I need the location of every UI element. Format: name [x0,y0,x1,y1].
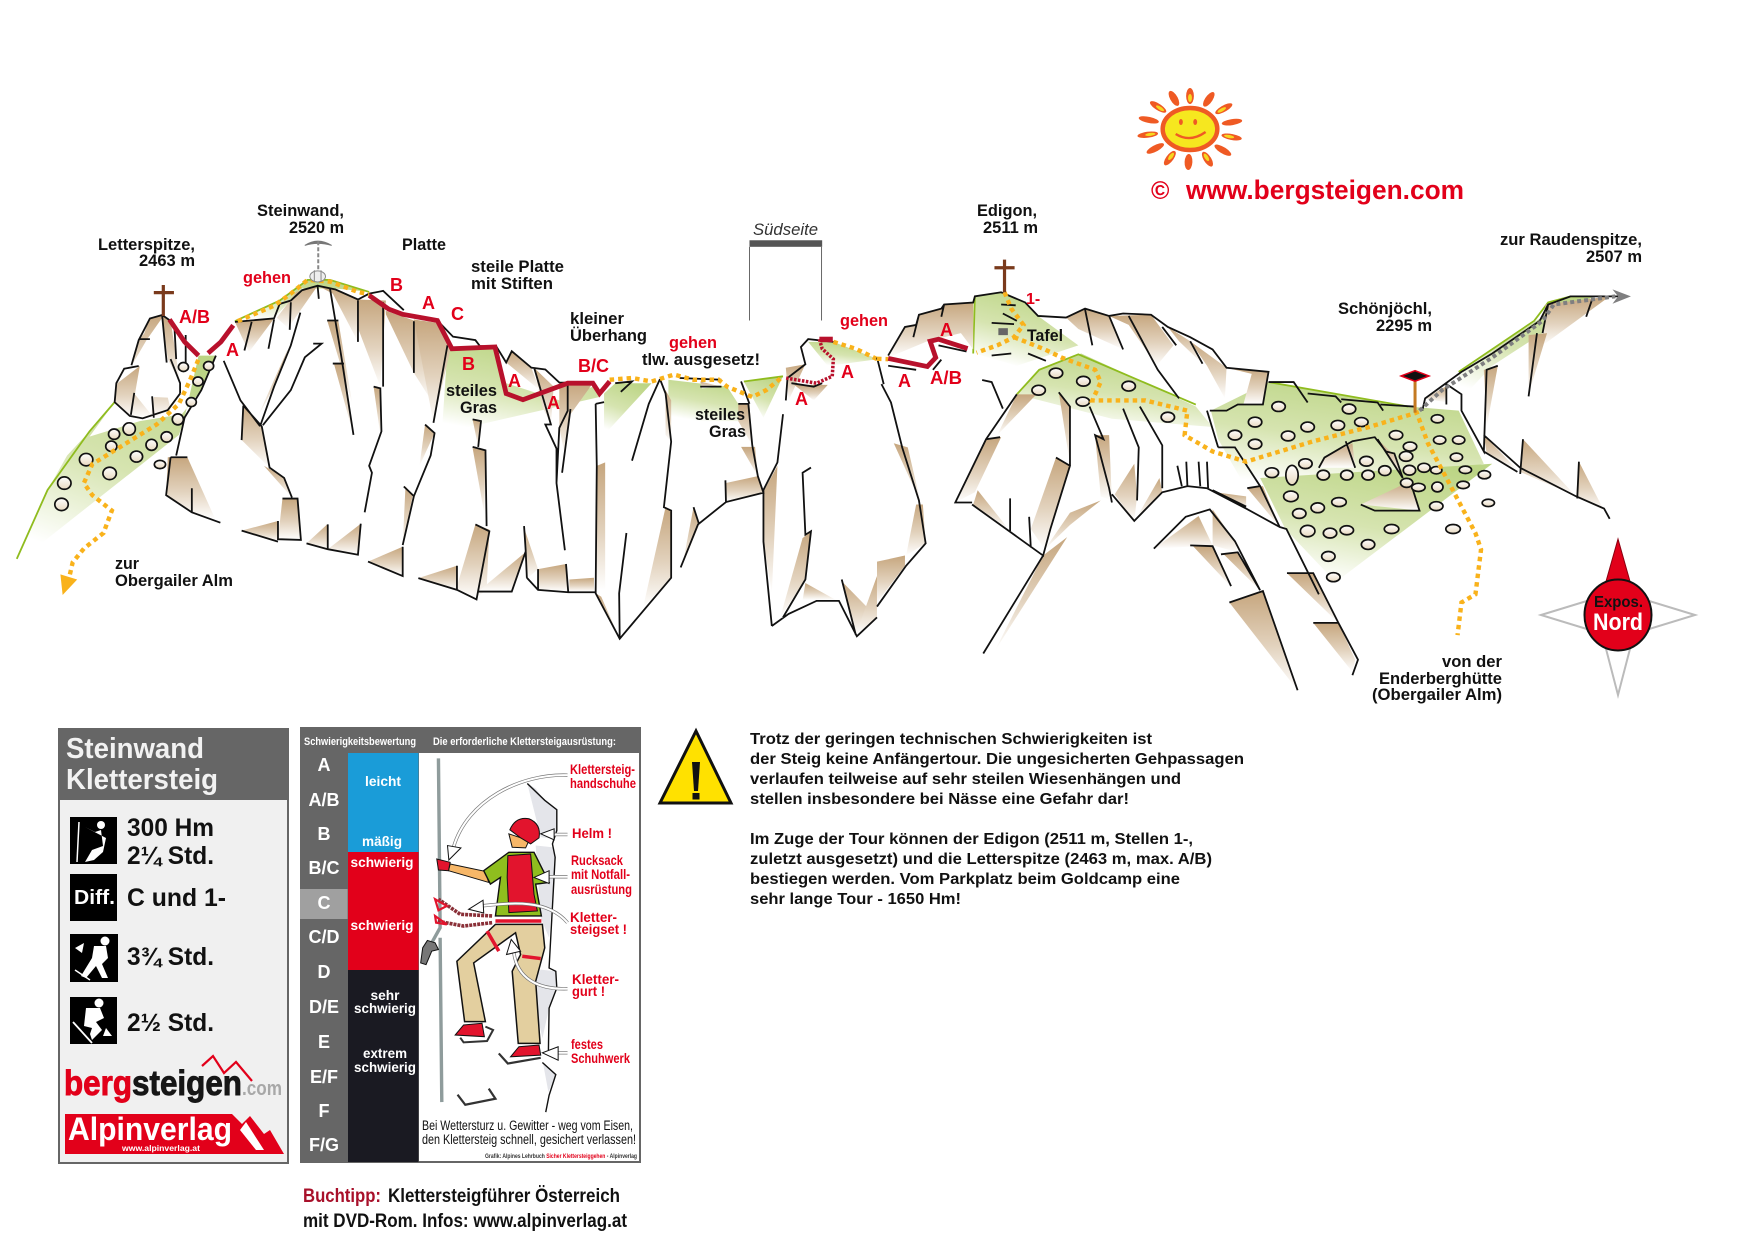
red climbing route left half [169,295,610,400]
figure: arm and hand [437,859,489,882]
orange walking routes left half [70,280,877,574]
difficulty grades on route: A [508,371,521,391]
header labels: Die erforderliche Klettersteigausrüstung: [433,736,616,748]
climber illustration [421,758,568,1112]
header labels [304,736,616,748]
boulders left slope [55,361,214,511]
map labels: Überhang [570,326,647,345]
map labels: mit Stiften [471,275,553,293]
difficulty colour bands: extrem [363,1045,407,1061]
map labels: Obergailer Alm [115,572,233,590]
warning text block: der Steig keine Anfängertour. Die ungesicherten Gehpassagen [750,751,1244,768]
map labels: 2520 m [289,219,344,237]
heading [66,733,218,796]
compass: exposure north [1541,539,1695,695]
difficulty grades on route: A [841,362,854,382]
map labels: Gras [709,423,746,441]
difficulty grades on route: A [898,371,911,391]
equipment labels [570,761,636,1066]
via ferrata set lanyards [435,899,492,926]
map labels: zur Raudenspitze, [1500,231,1642,249]
red climbing route right half [888,339,968,367]
difficulty grades on route: B [462,354,475,374]
book tip: mit DVD-Rom. Infos: www.alpinverlag.at [303,1211,628,1232]
difficulty grades on route: B/C [578,356,609,376]
warning text block: verlaufen teilweise auf sehr steilen Wiesenhängen und [750,771,1181,788]
climb height and time [127,814,214,870]
map labels: Tafel [1027,327,1063,345]
difficulty value: C und 1- [127,884,226,912]
equipment labels: gurt ! [572,983,605,999]
map labels: 2511 m [983,219,1038,237]
difficulty colour bands [348,753,418,1162]
figure: boots [455,1023,541,1057]
bracket: Südseite [749,240,822,321]
difficulty colour bands: sehr [370,987,400,1003]
difficulty grades on route: A/B [179,307,210,327]
difficulty colour bands: leicht [365,773,401,789]
orange walking routes right half [877,292,1481,635]
difficulty colour bands: schwierig [354,1059,416,1075]
panel: difficulty scale and equipment [300,727,641,1163]
climb height and time: 2¼ Std. [127,842,214,870]
icon: sun logo [1137,88,1243,170]
grass slopes right half [973,292,1593,582]
heading: Steinwand [66,733,204,765]
arrow: to Obergailer Alm [60,574,77,595]
icon: summit cross Letterspitze [154,285,174,316]
grade letters [308,755,340,1155]
climb height and time: 300 Hm [127,814,214,842]
difficulty grades on route [179,269,1040,413]
difficulty grades on route: gehen [243,269,291,287]
logo: bergsteigen.com: bergsteigen [64,1064,242,1103]
grade letters: C/D [308,927,340,947]
grey route to Raudenspitze with arrow [1420,289,1631,411]
grade letters: D [318,962,330,982]
highlight grade C [300,889,348,919]
red dashed variant near Südseite [786,337,833,383]
map labels: 2507 m [1586,248,1642,266]
map labels: Platte [402,236,446,254]
map labels: 2463 m [139,252,195,270]
equipment labels: Kletter- [572,971,619,987]
difficulty grades on route: gehen [840,312,888,330]
heading: Klettersteig [66,764,218,796]
figure: shirt [484,852,549,916]
map labels: kleiner [570,310,625,328]
figure: backpack [507,854,537,913]
grade letters: B [318,824,330,844]
warning text block: Im Zuge der Tour können der Edigon (2511 m, Stellen 1-, [750,831,1193,848]
equipment labels: Klettersteig- [570,761,635,777]
map labels: Enderberghütte [1379,670,1502,688]
icon: descent hiker [70,997,117,1044]
grade letters: E/F [310,1067,338,1087]
icon: information board Tafel [998,328,1008,335]
icon: warning triangle [660,731,731,803]
map labels: zur [115,555,140,573]
equipment area background [419,753,639,1161]
difficulty grades on route: A [940,320,953,340]
copyright url: © [1151,177,1170,205]
descent time: 2½ Std. [127,1009,214,1037]
difficulty grades on route: 1- [1026,291,1040,308]
warning text block: bestiegen werden. Vom Parkplatz beim Goldcamp eine [750,871,1180,888]
header labels: Schwierigkeitsbewertung [304,736,416,748]
book tip: Buchtipp: [303,1186,381,1207]
equipment labels: mit Notfall- [571,866,630,882]
grade letters: F [318,1101,330,1121]
difficulty grades on route: B [390,275,403,295]
difficulty colour bands: mäßig [362,833,402,849]
figure: harness [487,921,541,959]
storm warning text [422,1118,636,1147]
graphic credit: Grafik: Alpines Lehrbuch Sicher Klettersteiggehen - Alpinverlag [485,1154,637,1160]
icon: summit cross Edigon [994,260,1015,292]
book tip: Klettersteigführer Österreich [388,1186,620,1207]
map labels [98,202,1642,704]
logo: Alpinverlag: Alpinverlag [68,1111,232,1147]
equipment labels: Helm ! [572,825,612,841]
rock faces left half [115,286,877,639]
warning text block: sehr lange Tour - 1650 Hm! [750,891,961,908]
rock outlines right half [877,292,1626,690]
grade letters: D/E [309,997,339,1017]
map labels: Edigon, [977,202,1037,220]
logo: bergsteigen.com: .com [242,1078,282,1100]
grade letters: A [318,755,330,775]
equipment labels: Kletter- [570,909,617,925]
map labels: von der [1442,653,1503,671]
map labels: steiles [695,406,745,424]
map labels: Letterspitze, [98,236,195,254]
warning text block: Trotz der geringen technischen Schwierigkeiten ist [750,731,1153,748]
rock wall [527,784,557,1112]
difficulty colour bands: schwierig [350,917,414,933]
figure: head and helmet [509,818,539,848]
panorama: right half of the mountain [877,260,1631,690]
logo: Alpinverlag [65,1111,284,1154]
compass: exposure north: Expos. [1594,594,1643,611]
map labels: (Obergailer Alm) [1372,686,1502,704]
storm warning text: den Klettersteig schnell, gesichert verlassen! [422,1132,636,1147]
arrows to equipment labels [447,775,568,1060]
difficulty grades on route: A [422,293,435,313]
icon: ice axe summit Steinwand [305,241,332,282]
icon: signpost Schönjöchl [1401,371,1429,413]
warning text block [750,731,1244,908]
difficulty grades on route: C [451,304,464,324]
difficulty colour bands: schwierig [350,854,414,870]
grade letters: E [318,1032,330,1052]
steel cable and rungs [421,758,541,1105]
compass: exposure north: Nord [1593,609,1643,636]
difficulty grades on route: gehen [669,334,717,352]
difficulty grades on route: A [547,393,560,413]
grass slopes left half [17,280,878,559]
map labels: Südseite [753,221,818,239]
icon: ascent hiker [70,934,118,982]
map labels: Schönjöchl, [1338,300,1432,318]
equipment labels: ausrüstung [571,881,632,897]
equipment labels: steigset ! [570,921,627,937]
grade letters: C [318,893,330,913]
grade letters: A/B [308,790,340,810]
map labels: 2295 m [1376,317,1432,335]
equipment labels: Rucksack [571,852,623,868]
rock outlines left half [115,286,877,639]
storm warning text: Bei Wettersturz u. Gewitter - weg vom Eisen, [422,1118,633,1133]
icon: difficulty [70,874,117,921]
map labels: Gras [460,399,497,417]
warning text block: stellen insbesondere bei Nässe eine Gefahr dar! [750,791,1129,808]
logo: Alpinverlag: www.alpinverlag.at [121,1144,200,1153]
map labels: steiles [446,382,497,400]
book tip [303,1186,628,1232]
icon: difficulty: Diff. [74,887,115,909]
difficulty grades on route: A/B [930,368,962,388]
warning text block: zuletzt ausgesetzt) und die Letterspitze (2463 m, max. A/B) [750,851,1212,868]
map labels: Steinwand, [257,202,344,220]
figure: trousers [457,924,545,1043]
difficulty colour bands: schwierig [354,1000,416,1016]
icon: climber [70,817,117,864]
map labels: steile Platte [471,258,564,276]
difficulty grades on route: A [795,389,808,409]
equipment labels: festes [571,1036,603,1052]
grade letters: F/G [309,1135,339,1155]
panorama: left half of the mountain [17,240,878,639]
panel: Steinwand Klettersteig summary [58,728,289,1163]
equipment labels: handschuhe [570,775,636,791]
rock faces right half [877,296,1610,690]
difficulty grades on route: A [226,340,239,360]
approach time: 3¾ Std. [127,943,214,971]
equipment labels: Schuhwerk [571,1050,630,1066]
copyright url: www.bergsteigen.com [1185,175,1464,205]
map labels: tlw. ausgesetz! [642,351,760,369]
grade letters: B/C [308,858,340,878]
boulders right slopes [1032,368,1494,582]
